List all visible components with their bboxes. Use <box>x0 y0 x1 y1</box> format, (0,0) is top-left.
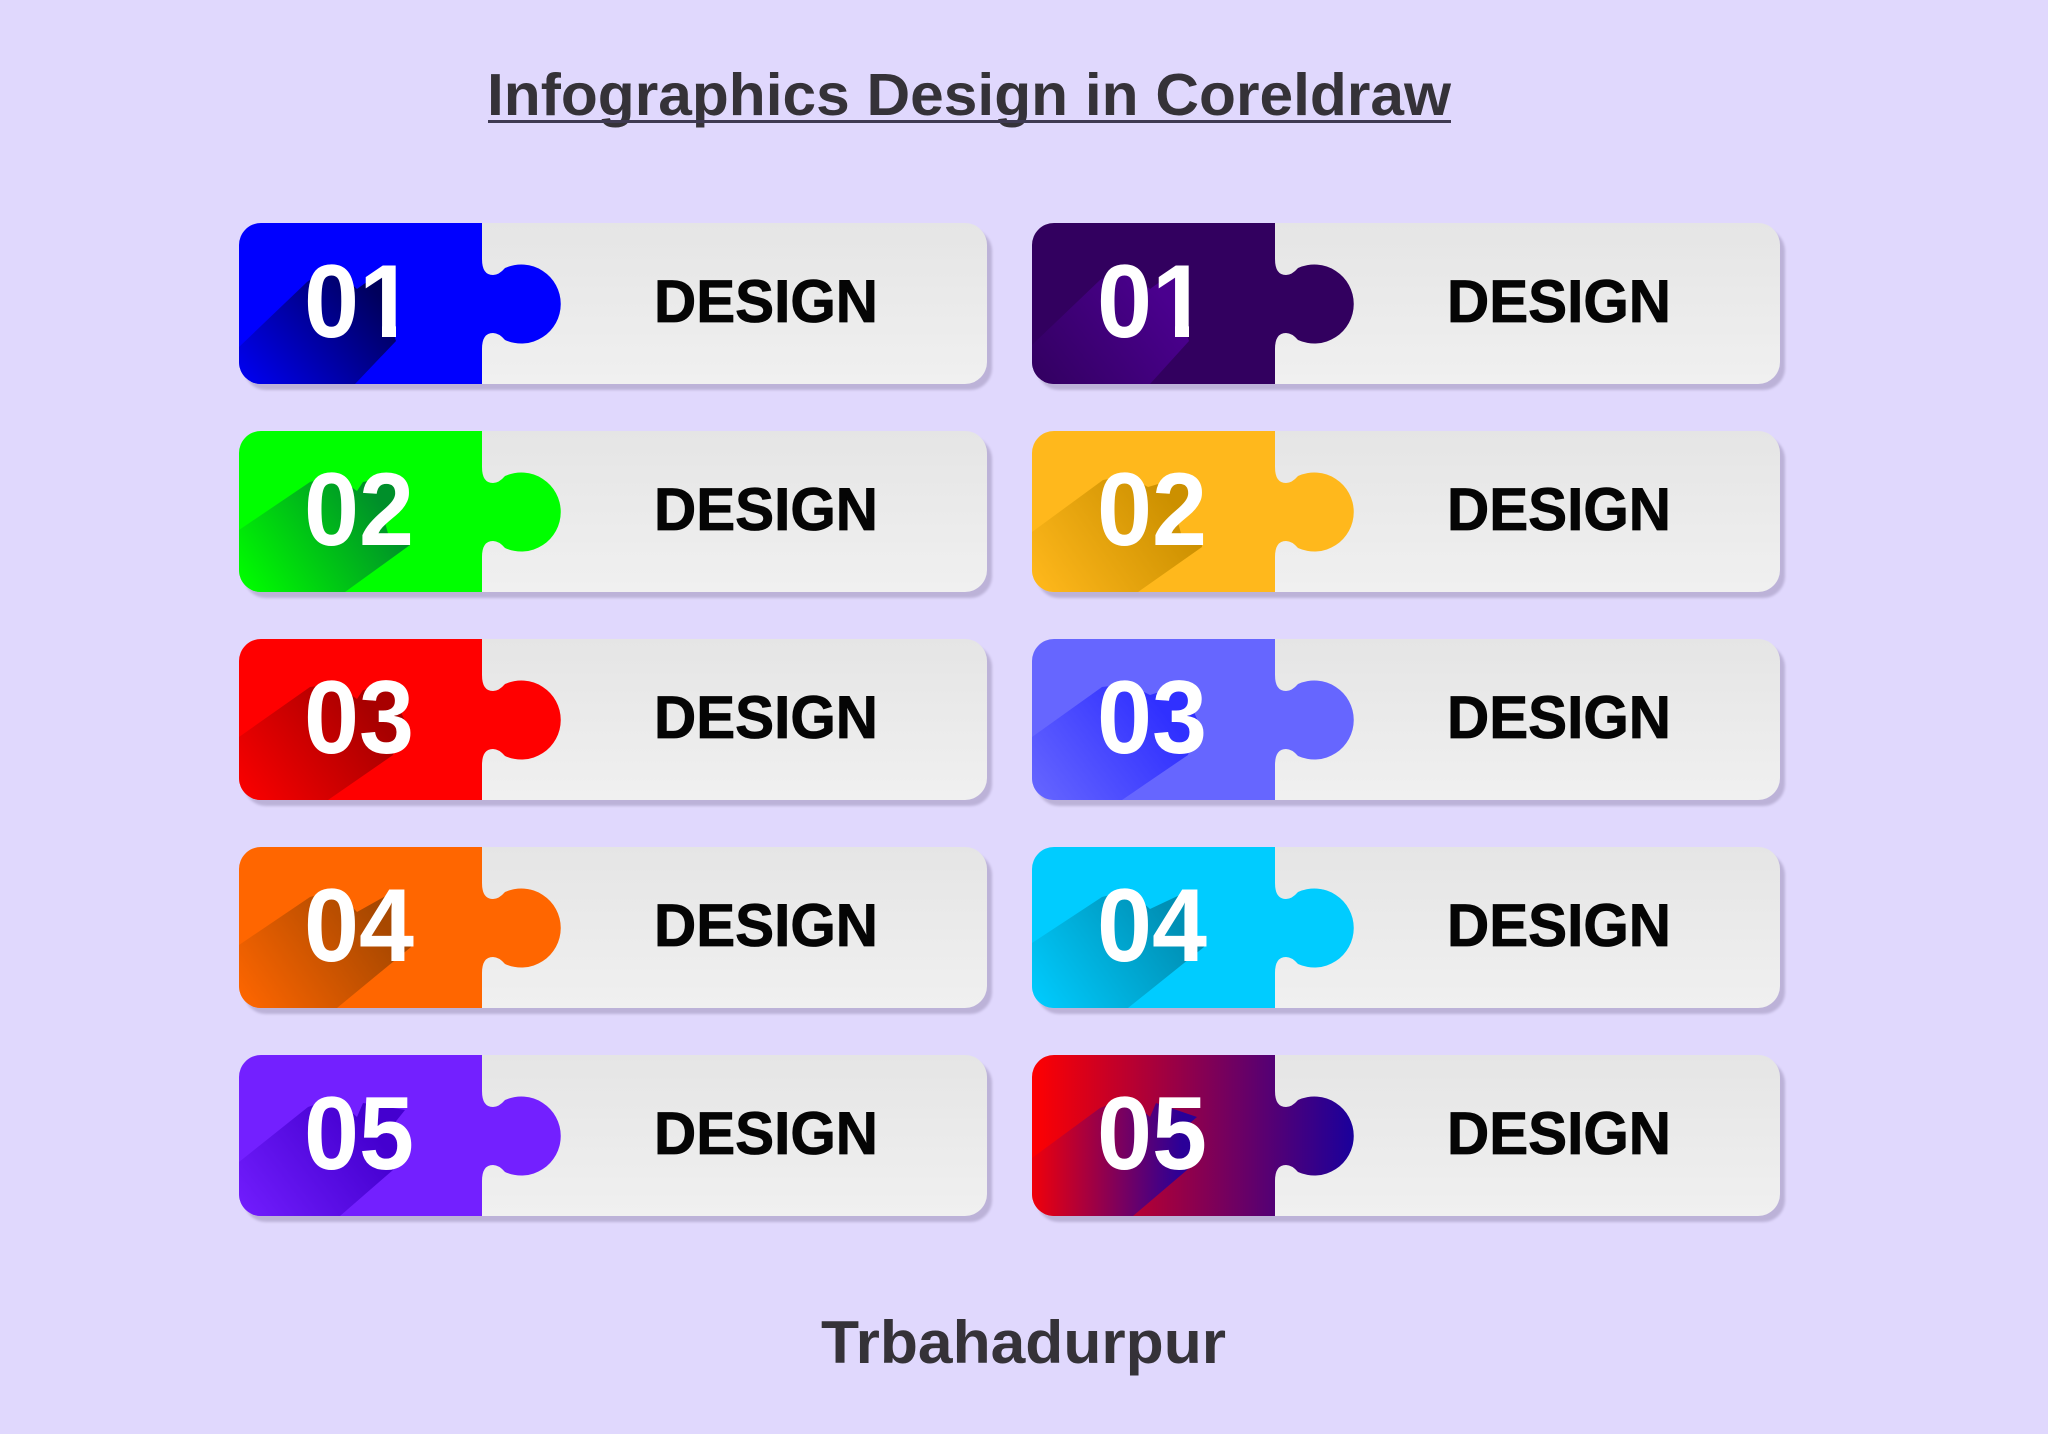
number 05: 05 <box>1097 1076 1207 1192</box>
number 04: 04 <box>1097 868 1207 984</box>
number 04: 04 <box>304 868 414 984</box>
long shadow: blue <box>239 269 396 384</box>
puzzle piece: green <box>239 431 561 592</box>
number 03: 03 <box>304 660 414 776</box>
label: design: DESIGN <box>1447 684 1671 751</box>
panel: amber item 02 <box>1032 431 1785 598</box>
puzzle piece: indigo <box>1032 223 1354 384</box>
long shadow: periwinkle <box>1032 685 1197 800</box>
label: design: DESIGN <box>654 684 878 751</box>
label: design: DESIGN <box>654 892 878 959</box>
number 01: 01 <box>304 244 414 360</box>
panel: periwinkle item 03 <box>1032 639 1785 806</box>
panel: violet item 05 <box>239 1055 992 1222</box>
puzzle piece: amber <box>1032 431 1354 592</box>
puzzle piece: red-to-navy gradient <box>1032 1055 1354 1216</box>
puzzle piece: cyan <box>1032 847 1354 1008</box>
label: design: DESIGN <box>654 268 878 335</box>
long shadow: violet <box>239 1101 405 1216</box>
long shadow: green <box>239 477 410 592</box>
number 05: 05 <box>304 1076 414 1192</box>
number 03: 03 <box>1097 660 1207 776</box>
label: design: DESIGN <box>1447 1100 1671 1167</box>
panel: green item 02 <box>239 431 992 598</box>
label: design: DESIGN <box>1447 268 1671 335</box>
number 02: 02 <box>304 452 414 568</box>
panel: blue item 01 <box>239 223 992 390</box>
panel: red item 03 <box>239 639 992 806</box>
long shadow: red <box>239 685 404 800</box>
puzzle piece: periwinkle <box>1032 639 1354 800</box>
label: design: DESIGN <box>654 476 878 543</box>
panel: indigo item 01 <box>1032 223 1785 390</box>
puzzle piece: blue <box>239 223 561 384</box>
puzzle piece: violet <box>239 1055 561 1216</box>
title: Infographics Design in Coreldraw <box>487 62 1451 128</box>
label: design: DESIGN <box>1447 892 1671 959</box>
label: design: DESIGN <box>654 1100 878 1167</box>
long shadow: cyan <box>1032 893 1204 1008</box>
panel: orange item 04 <box>239 847 992 1014</box>
long shadow: amber <box>1032 477 1202 592</box>
puzzle piece: orange <box>239 847 561 1008</box>
long shadow: indigo <box>1032 269 1189 384</box>
number 01: 01 <box>1097 244 1207 360</box>
footer credit: Trbahadurpur <box>821 1309 1226 1376</box>
long shadow: red-to-navy gradient <box>1032 1101 1197 1216</box>
long shadow: orange <box>239 893 411 1008</box>
panel: cyan item 04 <box>1032 847 1785 1014</box>
puzzle piece: red <box>239 639 561 800</box>
label: design: DESIGN <box>1447 476 1671 543</box>
panel: red-to-navy gradient item 05 <box>1032 1055 1785 1222</box>
number 02: 02 <box>1097 452 1207 568</box>
